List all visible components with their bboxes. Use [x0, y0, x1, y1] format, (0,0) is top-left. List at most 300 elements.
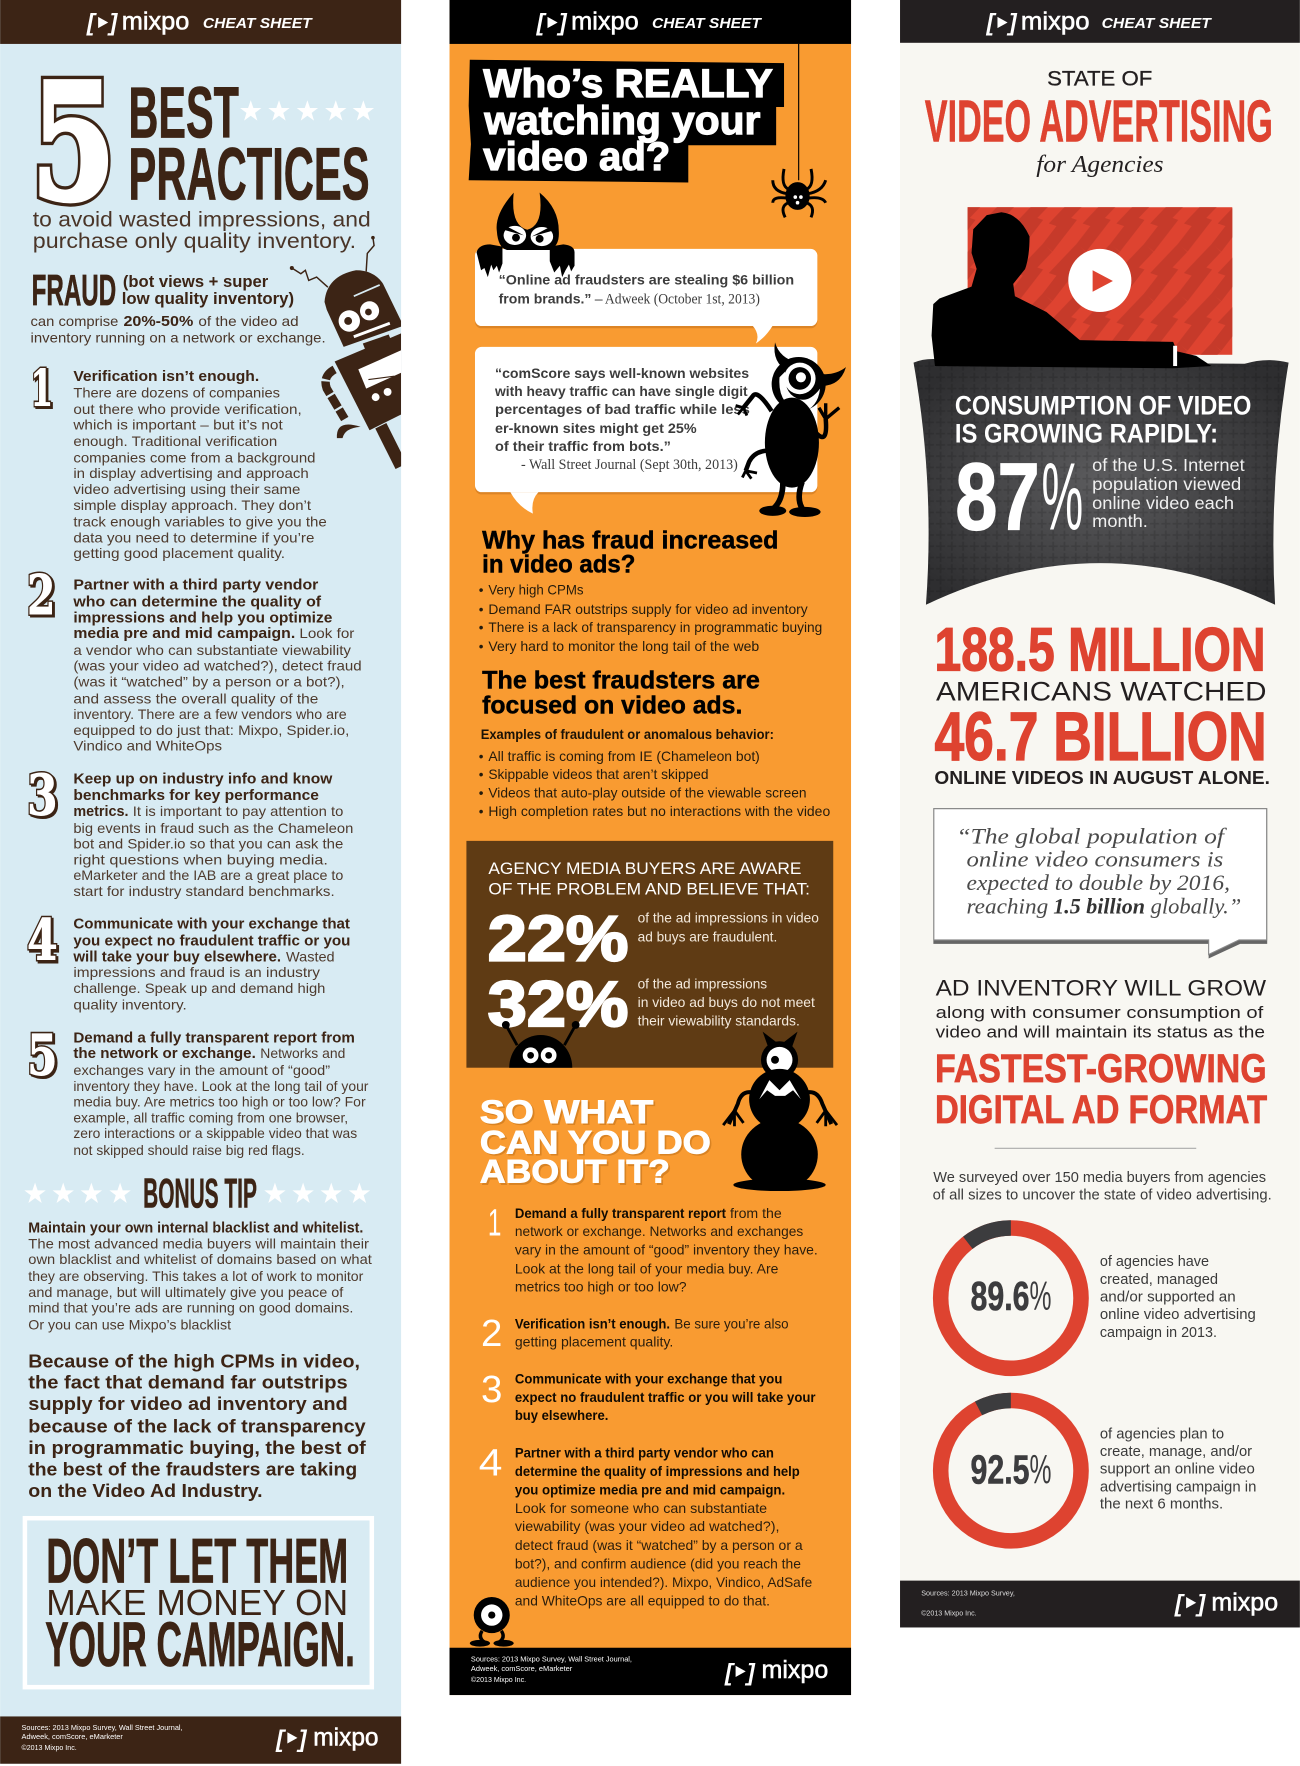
- footer: black: Sources: 2013 Mixpo Survey, Wall Street Journal,: [471, 1656, 632, 1663]
- fraud description: can comprise: [31, 314, 119, 330]
- step 2 text: (was your video ad watched?), detect fraud: [73, 659, 362, 675]
- footer: brown: [0, 1716, 401, 1764]
- donut description 1: campaign in 2013.: [1100, 1325, 1217, 1341]
- panel: state of video advertising: [900, 0, 1300, 1627]
- quote box: online video consumers is: [966, 847, 1224, 872]
- speech bubble: adweek quote: [475, 249, 817, 344]
- footer: charcoal: [900, 1581, 1300, 1627]
- speech bubble: adweek quote: –: [595, 292, 603, 308]
- action 4: 4: [479, 1441, 502, 1484]
- step 5 text: inventory they have. Look at the long tail of your: [73, 1079, 369, 1095]
- step 1 text: Verification isn’t enough.: [73, 369, 259, 385]
- footer: brown: [: [275, 1727, 286, 1753]
- step 4 text: [72, 917, 350, 1014]
- header: mixpo cheat sheet (brown): [: [86, 10, 97, 36]
- numeral 3: 3: [27, 762, 58, 828]
- stat: 32%: their viewability standards.: [638, 1013, 800, 1028]
- step 5 text: Networks and: [260, 1046, 345, 1062]
- step 2 text: impressions and help you optimize: [73, 610, 332, 626]
- stat: 87%: 87: [955, 443, 1040, 550]
- fraud heading: (bot views + super: [123, 273, 269, 291]
- panel: agency media buyers stats: [466, 840, 834, 1068]
- stat: 32%: 32%: [488, 968, 628, 1040]
- header: mixpo cheat sheet (charcoal): [: [986, 10, 997, 36]
- illustration: video screen with play button: [968, 207, 1232, 355]
- step 2 text: inventory. There are a few vendors who are: [73, 707, 347, 723]
- numeral 5: 5: [29, 1024, 59, 1090]
- action 1: vary in the amount of “good” inventory they have.: [515, 1243, 818, 1258]
- heading: so what can you do about it: CAN YOU DO: [480, 1123, 711, 1160]
- step 2 text: a vendor who can substantiate viewability: [73, 643, 352, 659]
- header: mixpo cheat sheet (black): ]: [556, 10, 568, 36]
- step 4 text: Wasted: [286, 949, 335, 965]
- bullet list: examples: •: [479, 785, 484, 800]
- step 2 text: Vindico and WhiteOps: [73, 739, 222, 755]
- fraud heading: low quality inventory): [122, 290, 294, 308]
- step 2 text: media pre and mid campaign.: [73, 626, 295, 642]
- step 2 text: who can determine the quality of: [72, 594, 321, 610]
- summary paragraph: supply for video ad inventory and: [28, 1393, 348, 1414]
- summary paragraph: Because of the high CPMs in video,: [28, 1350, 360, 1371]
- footer: black: [: [724, 1660, 735, 1686]
- action 1: [488, 1202, 818, 1294]
- action 2: 2: [481, 1312, 502, 1355]
- quote box: reaching: [966, 893, 1048, 918]
- step 3 text: [73, 771, 353, 900]
- donut description 2: [1100, 1426, 1256, 1513]
- stat: 87%: %: [1041, 443, 1083, 550]
- bullet list: reasons: •: [479, 639, 484, 654]
- header: mixpo cheat sheet (black): mixpo: [571, 8, 639, 35]
- stat: 32%: [488, 968, 815, 1040]
- step 3: [27, 762, 353, 900]
- heading: why has fraud increased: Why has fraud increased: [482, 527, 778, 554]
- bullet list: reasons: There is a lack of transparency in programmatic buying: [488, 620, 822, 635]
- bonus tip text: Maintain your own internal blacklist and whitelist.: [28, 1221, 363, 1237]
- stat: 87%: population viewed: [1092, 474, 1241, 494]
- bullet list: reasons: Very hard to monitor the long tail of the web: [488, 639, 759, 654]
- action 4: audience you intended?). Mixpo, Vindico, AdSafe: [515, 1575, 812, 1590]
- bullet list: reasons: •: [479, 583, 484, 598]
- donut chart: 92.5%: [941, 1401, 1081, 1541]
- fraud description: [31, 314, 326, 346]
- numeral 1: 1: [31, 358, 53, 417]
- action 4: Partner with a third party vendor who can: [515, 1445, 774, 1460]
- icon: cyclops monster waving: [736, 342, 846, 517]
- bullet list: examples: High completion rates but no interactions with the video: [488, 804, 830, 819]
- heading: best fraudsters: focused on video ads.: [482, 692, 742, 719]
- bonus tip text: The most advanced media buyers will maintain their: [28, 1236, 369, 1252]
- stat: 32%: of the ad impressions: [638, 976, 767, 991]
- step 3 text: big events in fraud such as the Chameleon: [73, 821, 353, 837]
- numeral 2: 2: [27, 563, 55, 627]
- bonus tip text: and manage, but will ultimately give you peace of: [28, 1285, 343, 1301]
- heading: so what can you do about it: ABOUT IT?: [482, 1154, 672, 1191]
- step 3 text: start for industry standard benchmarks.: [73, 884, 335, 900]
- footer: black: mixpo: [762, 1657, 828, 1684]
- title: best practices: BEST: [129, 73, 239, 153]
- numeral 1: 1: [32, 360, 55, 419]
- bullet list: examples: Videos that auto-play outside of the viewable screen: [488, 785, 807, 800]
- callout: don't let them: DON’T LET THEM: [46, 1526, 348, 1596]
- bullet list: reasons: Demand FAR outstrips supply for video ad inventory: [488, 602, 808, 617]
- step 3 text: bot and Spider.io so that you can ask the: [73, 837, 343, 853]
- footer: brown: mixpo: [313, 1725, 379, 1752]
- numeral 2: 2: [27, 563, 55, 627]
- text: survey intro: of all sizes to uncover the state of video advertising.: [933, 1187, 1272, 1203]
- step 4 text: challenge. Speak up and demand high: [73, 981, 325, 997]
- footer: charcoal: ©2013 Mixpo Inc.: [921, 1610, 977, 1618]
- text: ad inventory will grow: along with consumer consumption of: [936, 1003, 1264, 1022]
- step 1 text: out there who provide verification,: [73, 402, 302, 418]
- step 3 text: Keep up on industry info and know: [73, 771, 333, 787]
- action 2: Verification isn’t enough.: [515, 1316, 670, 1331]
- bullet list: examples: •: [479, 767, 484, 782]
- subtitle: to avoid wasted impressions, and: [33, 207, 371, 231]
- icon: toothy cyclops monster: [723, 1032, 837, 1191]
- action 1: metrics too high or too low?: [515, 1279, 687, 1294]
- speech bubble: wsj quote: of their traffic from bots.”: [495, 439, 671, 455]
- step 1 text: data you need to determine if you’re: [73, 530, 314, 546]
- numeral 4: 4: [27, 908, 58, 974]
- step 1 text: getting good placement quality.: [73, 546, 285, 562]
- fraud description: of the video ad: [198, 314, 299, 330]
- step 3 text: benchmarks for key performance: [73, 788, 319, 804]
- stat: 87%: of the U.S. Internet: [1092, 455, 1245, 475]
- header: mixpo cheat sheet (black): [450, 0, 851, 44]
- summary paragraph: in programmatic buying, the best of: [28, 1437, 367, 1458]
- speech bubble: adweek quote: “Online ad fraudsters are stealing $6 billion: [499, 272, 794, 288]
- step 1 text: video advertising using their same: [73, 482, 301, 498]
- bullet list: reasons: Very high CPMs: [488, 583, 584, 598]
- donut description 2: advertising campaign in: [1100, 1479, 1256, 1495]
- step 5 text: not skipped should raise big red flags.: [73, 1143, 305, 1159]
- quote box: “The global population of: [956, 824, 1227, 849]
- donut chart: 92.5%: 92.5: [971, 1446, 1030, 1492]
- text: ad inventory will grow: AD INVENTORY WILL GROW: [936, 976, 1267, 1001]
- title: who's really watching your video ad: [469, 60, 784, 182]
- icon: peeking monster: [477, 193, 575, 277]
- step 2: [27, 563, 362, 755]
- text: ad inventory will grow: [936, 976, 1267, 1041]
- stat: 32%: in video ad buys do not meet: [638, 995, 815, 1010]
- header: mixpo cheat sheet (black): CHEAT SHEET: [652, 15, 763, 32]
- step 1 text: track enough variables to give you the: [73, 515, 327, 531]
- heading: fastest-growing digital ad format: [935, 1047, 1267, 1132]
- numeral 4: 4: [27, 908, 58, 974]
- donut description 1: and/or supported an: [1100, 1289, 1236, 1305]
- panel: 5 best practices: [0, 0, 401, 1764]
- step 3 text: right questions when buying media.: [73, 852, 328, 868]
- title: best practices: PRACTICES: [129, 132, 370, 215]
- bonus tip text: Or you can use Mixpo’s blacklist: [28, 1318, 231, 1334]
- icon: robot: [290, 236, 401, 466]
- summary paragraph: because of the lack of transparency: [28, 1416, 366, 1437]
- footer: brown: Sources: 2013 Mixpo Survey, Wall Street Journal,: [22, 1725, 183, 1732]
- step 4 text: quality inventory.: [73, 998, 187, 1014]
- summary paragraph: the best of the fraudsters are taking: [28, 1458, 357, 1479]
- header: mixpo cheat sheet (brown): CHEAT SHEET: [203, 15, 313, 32]
- donut chart: 92.5%: %: [1030, 1446, 1052, 1492]
- bullet list: examples: Skippable videos that aren’t skipped: [488, 767, 709, 782]
- panel: agency media buyers stats: AGENCY MEDIA BUYERS ARE AWARE: [488, 860, 802, 878]
- subtitle: [33, 207, 371, 253]
- bonus tip text: they are observing. This takes a lot of work to monitor: [28, 1269, 364, 1285]
- speech bubble: adweek quote: from brands.”: [499, 292, 591, 308]
- heading: why has fraud increased: [482, 527, 778, 579]
- step 4 text: impressions and fraud is an industry: [73, 965, 321, 981]
- bullet list: examples: •: [479, 749, 484, 764]
- speech bubble: wsj quote: [475, 347, 817, 514]
- stat: 87%: [955, 443, 1245, 550]
- footer: brown: ]: [296, 1727, 308, 1753]
- action 4: and WhiteOps are all equipped to do that.: [515, 1594, 770, 1609]
- action 4: you optimize media pre and mid campaign.: [515, 1483, 785, 1498]
- subtitle: for agencies: for Agencies: [1036, 151, 1164, 178]
- footer: black: [450, 1648, 851, 1695]
- bonus tip text: own blacklist and whitelist of domains based on what: [28, 1252, 372, 1268]
- header: mixpo cheat sheet (black): [: [536, 10, 547, 36]
- footer: black: Adweek, comScore, eMarketer: [471, 1666, 573, 1673]
- heading: why has fraud increased: in video ads?: [482, 552, 635, 579]
- header: mixpo cheat sheet (brown): mixpo: [122, 8, 189, 35]
- heading: so what can you do about it: SO WHAT: [482, 1095, 655, 1132]
- footer: charcoal: Sources: 2013 Mixpo Survey,: [921, 1591, 1015, 1598]
- footer: black: ]: [744, 1660, 756, 1686]
- callout: don't let them: YOUR CAMPAIGN.: [45, 1610, 355, 1680]
- step 1 text: enough. Traditional verification: [73, 434, 277, 450]
- step 1: [31, 358, 327, 562]
- step 4 text: you expect no fraudulent traffic or you: [73, 934, 350, 950]
- step 3 text: eMarketer and the IAB are a great place to: [73, 868, 343, 884]
- panel: who's really watching: [450, 0, 851, 1695]
- heading: so what can you do about it: [480, 1093, 713, 1191]
- stat: 22%: 22%: [488, 903, 628, 975]
- title: who's really watching your video ad: watching your: [483, 99, 760, 143]
- action 1: 1: [488, 1202, 501, 1245]
- bullet list: reasons: [479, 583, 822, 654]
- bullet list: reasons: •: [479, 602, 484, 617]
- step 5 text: zero interactions or a skippable video that was: [73, 1126, 357, 1142]
- fraud heading: [32, 266, 294, 315]
- header: mixpo cheat sheet (brown): [0, 0, 401, 44]
- step 2 text: [72, 578, 362, 755]
- speech bubble: wsj quote: with heavy traffic can have single digit: [494, 384, 748, 400]
- bonus tip heading with stars: [24, 1169, 370, 1216]
- header: mixpo cheat sheet (charcoal): CHEAT SHEET: [1102, 15, 1213, 32]
- stat: 87%: month.: [1092, 511, 1148, 531]
- footer: black: ©2013 Mixpo Inc.: [471, 1676, 526, 1684]
- action 3: expect no fraudulent traffic or you will take your: [515, 1390, 816, 1405]
- step 5 text: Demand a fully transparent report from: [73, 1030, 355, 1046]
- donut description 2: the next 6 months.: [1100, 1497, 1223, 1513]
- stat: 188.5 million americans: ONLINE VIDEOS IN AUGUST ALONE.: [934, 767, 1270, 788]
- subheading: examples: Examples of fraudulent or anomalous behavior:: [481, 727, 774, 742]
- text: survey intro: [933, 1170, 1272, 1203]
- step 4 text: will take your buy elsewhere.: [72, 949, 281, 965]
- speech bubble: adweek quote: Adweek (October 1st, 2013): [605, 292, 760, 308]
- action 4: viewability (was your video ad watched?),: [515, 1519, 780, 1534]
- quote box: 1.5 billion: [1053, 893, 1145, 918]
- stat: 87%: online video each: [1092, 493, 1234, 513]
- step 1 text: simple display approach. They don’t: [73, 498, 311, 514]
- action 2: Be sure you’re also: [674, 1316, 789, 1331]
- stat: 22%: [488, 903, 819, 975]
- stat: 188.5 million americans: AMERICANS WATCHED: [936, 677, 1267, 707]
- heading: so what can you do about it: CAN YOU DO: [482, 1125, 713, 1162]
- action 2: getting placement quality.: [515, 1334, 673, 1349]
- step 2 text: and assess the overall quality of the: [73, 691, 318, 707]
- numeral 1: [31, 358, 55, 419]
- footer: charcoal: mixpo: [1211, 1590, 1278, 1617]
- donut chart: 89.6%: %: [1030, 1273, 1052, 1319]
- bullet list: examples: •: [479, 804, 484, 819]
- step 5 text: media buy. Are metrics too high or too low? For: [73, 1095, 366, 1111]
- quote box: globally.”: [1151, 893, 1241, 918]
- action 4: determine the quality of impressions and help: [515, 1464, 800, 1479]
- donut description 2: of agencies plan to: [1100, 1426, 1224, 1442]
- header: mixpo cheat sheet (charcoal): ]: [1006, 10, 1018, 36]
- numeral 2: 2: [29, 565, 57, 629]
- fraud description: 20%-50%: [123, 314, 193, 330]
- action 1: network or exchange. Networks and exchanges: [515, 1224, 803, 1239]
- text: ad inventory will grow: video and will maintain its status as the: [936, 1022, 1265, 1041]
- bullet list: examples: All traffic is coming from IE (Chameleon bot): [488, 749, 760, 764]
- title: who's really watching your video ad: Who’s REALLY: [483, 62, 773, 106]
- big decorative numeral 5: 5: [31, 48, 116, 237]
- step 5 text: example, all traffic coming from one browser,: [73, 1110, 348, 1126]
- donut description 1: created, managed: [1100, 1272, 1218, 1288]
- bonus tip heading with stars: BONUS TIP: [143, 1169, 257, 1216]
- footer: charcoal: [: [1174, 1592, 1185, 1618]
- text: consumption heading: CONSUMPTION OF VIDEO: [955, 390, 1251, 420]
- numeral 4: 4: [29, 909, 59, 975]
- illustration: sofa panel: [914, 359, 1289, 605]
- text: survey intro: We surveyed over 150 media buyers from agencies: [933, 1170, 1266, 1186]
- donut chart: 89.6%: 89.6: [971, 1273, 1030, 1319]
- bonus tip text: [28, 1221, 372, 1334]
- step 2 text: Partner with a third party vendor: [73, 578, 319, 594]
- summary paragraph: on the Video Ad Industry.: [28, 1480, 263, 1501]
- action 1: from the: [730, 1206, 782, 1221]
- illustration: man silhouette: [932, 212, 1211, 368]
- header: mixpo cheat sheet (brown): ]: [106, 10, 118, 36]
- header: mixpo cheat sheet (charcoal): [900, 0, 1300, 43]
- stat: 22%: ad buys are fraudulent.: [638, 930, 777, 945]
- summary paragraph: the fact that demand far outstrips: [28, 1372, 348, 1393]
- step 1 text: There are dozens of companies: [73, 386, 280, 402]
- step 1 text: [72, 369, 327, 562]
- step 2 text: Look for: [299, 626, 355, 642]
- step 1 text: which is important – but it’s not: [72, 418, 283, 434]
- action 4: detect fraud (was it “watched” by a person or a: [515, 1538, 803, 1553]
- action 4: bot?), and confirm audience (did you reach the: [515, 1556, 801, 1571]
- action 3: buy elsewhere.: [515, 1408, 608, 1423]
- donut description 1: of agencies have: [1100, 1254, 1209, 1270]
- speech bubble: wsj quote: percentages of bad traffic while less: [495, 402, 750, 418]
- action 1: Demand a fully transparent report: [515, 1206, 727, 1221]
- step 4 text: Communicate with your exchange that: [73, 917, 350, 933]
- panel: agency media buyers stats: OF THE PROBLEM AND BELIEVE THAT:: [488, 880, 810, 898]
- donut description 2: create, manage, and/or: [1100, 1444, 1252, 1460]
- numeral 3: 3: [27, 762, 58, 828]
- text: consumption heading: IS GROWING RAPIDLY:: [955, 419, 1218, 449]
- donut chart: 89.6%: [941, 1228, 1081, 1368]
- quote box: [933, 808, 1267, 958]
- donut description 1: [1100, 1254, 1256, 1341]
- bullet list: examples: [479, 749, 830, 819]
- numeral 1: 1: [31, 358, 53, 417]
- numeral 3: 3: [29, 764, 59, 830]
- action 4: [479, 1441, 812, 1609]
- step 5: [27, 1022, 369, 1159]
- icon: small eyeball monster: [470, 1597, 514, 1647]
- step 5 text: the network or exchange.: [73, 1046, 256, 1062]
- stat: 22%: of the ad impressions in video: [638, 910, 819, 925]
- donut description 1: online video advertising: [1100, 1307, 1256, 1323]
- footer: charcoal: ]: [1194, 1592, 1206, 1618]
- footer: brown: Adweek, comScore, eMarketer: [22, 1734, 124, 1741]
- heading: best fraudsters: [482, 668, 760, 719]
- speech bubble: wsj quote: “comScore says well-known websites: [495, 366, 749, 382]
- action 1: Look at the long tail of your media buy. Are: [515, 1261, 778, 1276]
- step 3 text: It is important to pay attention to: [133, 804, 343, 820]
- callout: don't let them: [25, 1518, 372, 1687]
- footer: brown: ©2013 Mixpo Inc.: [22, 1744, 77, 1752]
- step 5 text: [73, 1030, 369, 1159]
- callout: don't let them: MAKE MONEY ON: [46, 1582, 348, 1623]
- text: consumption heading: [955, 390, 1251, 449]
- action 3: Communicate with your exchange that you: [515, 1372, 782, 1387]
- step 3 text: metrics.: [73, 804, 129, 820]
- numeral 5: 5: [27, 1022, 58, 1088]
- five white stars: [240, 100, 374, 121]
- title: who's really watching your video ad: video ad?: [483, 135, 670, 179]
- quote box: expected to double by 2016,: [966, 870, 1230, 895]
- header: mixpo cheat sheet (charcoal): mixpo: [1021, 8, 1090, 35]
- bullet list: reasons: •: [479, 620, 484, 635]
- step 4: [27, 908, 350, 1014]
- heading: best fraudsters: The best fraudsters are: [482, 668, 760, 695]
- step 2 text: (was it “watched” by a person or a bot?),: [73, 674, 345, 690]
- step 1 text: companies come from a background: [73, 450, 315, 466]
- speech bubble: wsj quote: er-known sites might get 25%: [495, 421, 697, 437]
- summary paragraph: [28, 1350, 367, 1501]
- heading: so what can you do about it: SO WHAT: [480, 1093, 653, 1130]
- step 1 text: in display advertising and approach: [73, 466, 309, 482]
- speech bubble: wsj quote: - Wall Street Journal (Sept 30th, 2013): [521, 457, 738, 473]
- icon: spider: [773, 44, 826, 217]
- numeral 5: 5: [27, 1022, 58, 1088]
- action 2: [481, 1312, 789, 1355]
- action 3: 3: [481, 1368, 502, 1411]
- stat: 188.5 million americans: [934, 616, 1270, 788]
- donut description 2: support an online video: [1100, 1462, 1255, 1478]
- title: state of: STATE OF: [1047, 67, 1152, 91]
- subtitle: purchase only quality inventory.: [33, 229, 356, 253]
- title: best practices: [129, 73, 370, 215]
- big decorative numeral 5: 5: [31, 48, 116, 237]
- icon: peeking antenna monster: [502, 1021, 580, 1068]
- bonus tip text: mind that you’re ads are running on good domains.: [28, 1301, 353, 1317]
- action 4: Look for someone who can substantiate: [515, 1501, 767, 1516]
- heading: so what can you do about it: ABOUT IT?: [480, 1153, 670, 1190]
- step 2 text: equipped to do just that: Mixpo, Spider.io,: [73, 723, 349, 739]
- fraud description: inventory running on a network or exchange.: [31, 330, 326, 346]
- step 5 text: exchanges vary in the amount of “good”: [73, 1063, 330, 1079]
- action 3: [481, 1368, 816, 1423]
- fraud heading: FRAUD: [32, 266, 116, 315]
